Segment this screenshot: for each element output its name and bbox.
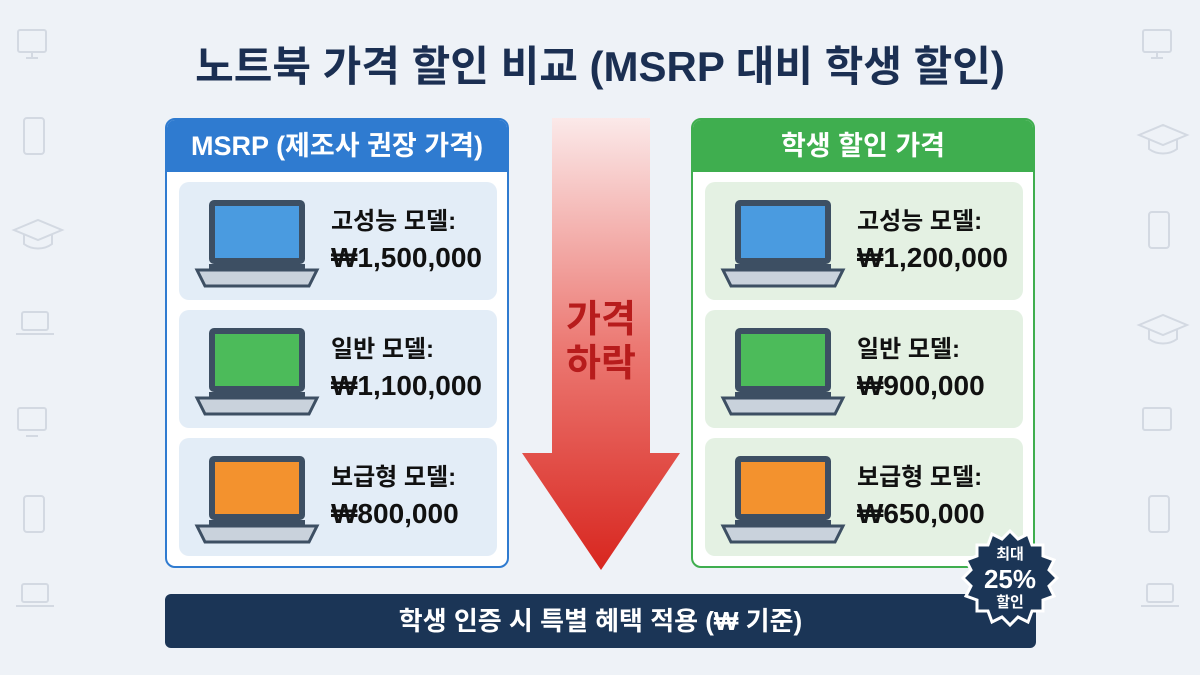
card: basic bbox=[179, 438, 497, 556]
badge: max 25%: 25% bbox=[984, 564, 1036, 594]
bottom banner: 학생 인증 시 특별 혜택 적용 (₩ 기준) bbox=[399, 606, 802, 636]
card: mid: ₩1,100,000 bbox=[331, 370, 482, 401]
card: high: 고성능 모델: bbox=[857, 208, 982, 235]
badge: max 25%: 할인 bbox=[996, 594, 1024, 611]
card: high: ₩1,500,000 bbox=[331, 242, 482, 273]
card: basic: 보급형 모델: bbox=[331, 464, 456, 491]
card: basic: 보급형 모델: bbox=[857, 464, 982, 491]
bottom banner bbox=[165, 594, 1036, 648]
arrow label: 가격 bbox=[566, 299, 636, 341]
card: mid bbox=[705, 310, 1023, 428]
card: mid: 일반 모델: bbox=[857, 336, 960, 363]
arrow label bbox=[566, 299, 636, 385]
card: mid: ₩900,000 bbox=[857, 370, 985, 401]
card: high: 고성능 모델: bbox=[331, 208, 456, 235]
panel: MSRP bbox=[165, 118, 509, 568]
badge: max 25%: 최대 bbox=[996, 546, 1024, 563]
card: basic: ₩800,000 bbox=[331, 498, 459, 529]
card: high: ₩1,200,000 bbox=[857, 242, 1008, 273]
card: basic: ₩650,000 bbox=[857, 498, 985, 529]
card: mid: 일반 모델: bbox=[331, 336, 434, 363]
card: high bbox=[705, 182, 1023, 300]
card: mid bbox=[179, 310, 497, 428]
heading: student bbox=[693, 120, 1033, 172]
heading: MSRP: MSRP (제조사 권장 가격) bbox=[191, 131, 483, 161]
card: basic bbox=[705, 438, 1023, 556]
arrow: price drop bbox=[522, 118, 680, 570]
arrow label: 하락 bbox=[566, 343, 636, 385]
card: high bbox=[179, 182, 497, 300]
badge: max 25% bbox=[961, 529, 1059, 627]
heading: MSRP bbox=[167, 120, 507, 172]
heading: student: 학생 할인 가격 bbox=[781, 131, 945, 161]
title: 노트북 가격 할인 비교 (MSRP 대비 학생 할인) bbox=[195, 43, 1005, 90]
panel: student bbox=[691, 118, 1035, 568]
